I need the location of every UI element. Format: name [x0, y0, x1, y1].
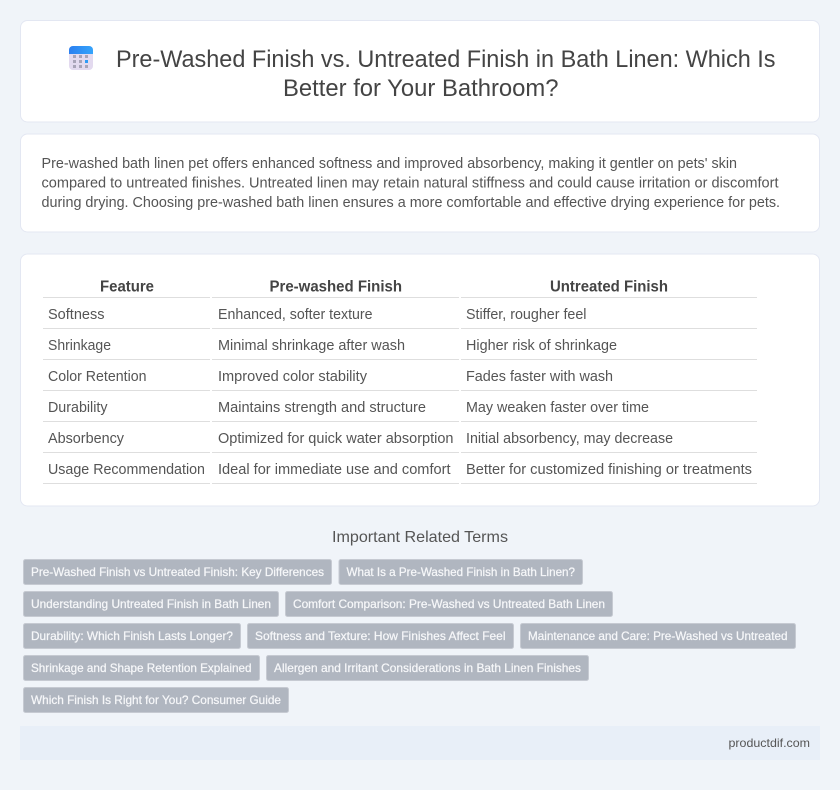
- row: color retention: Improved color stability: [218, 369, 368, 385]
- tag: [266, 656, 588, 680]
- tag: What Is a Pre-Washed Finish in Bath Linen?: [346, 565, 575, 579]
- row: usage recommendation: Ideal for immediate use and comfort: [218, 462, 451, 478]
- tag: [24, 656, 260, 680]
- intro text: compared to untreated finishes. Untreated linen may retain natural stiffness and could cause irritation or discomfort: [42, 176, 778, 192]
- row: color retention: [43, 369, 757, 391]
- intro text: Pre-washed bath linen pet offers enhanced softness and improved absorbency, making it gentler on pets' skin: [42, 156, 737, 172]
- row: durability: [43, 400, 757, 422]
- tag: Softness and Texture: How Finishes Affect Feel: [255, 629, 506, 643]
- row: absorbency: Initial absorbency, may decrease: [466, 431, 673, 447]
- intro text: during drying. Choosing pre-washed bath linen ensures a more comfortable and effective drying experience for pets.: [42, 195, 780, 211]
- row: color retention: Fades faster with wash: [466, 369, 613, 385]
- tag: [24, 592, 278, 616]
- row: durability: Maintains strength and structure: [218, 400, 426, 416]
- table header row: [43, 278, 757, 298]
- row: absorbency: Optimized for quick water absorption: [218, 431, 454, 447]
- footer: productdif.com: [728, 736, 810, 750]
- tag: Allergen and Irritant Considerations in Bath Linen Finishes: [274, 661, 581, 675]
- title: Pre-Washed Finish vs. Untreated Finish in Bath Linen: Which Is: [116, 46, 776, 73]
- panel: intro paragraph: [20, 134, 820, 232]
- tag: [248, 624, 514, 648]
- row: shrinkage: Higher risk of shrinkage: [466, 338, 617, 354]
- tag: [339, 560, 582, 584]
- row: absorbency: [43, 431, 757, 453]
- row: usage recommendation: [43, 462, 757, 484]
- tag: [520, 624, 796, 648]
- tag: Durability: Which Finish Lasts Longer?: [31, 629, 233, 643]
- intro text: [42, 156, 780, 211]
- row: shrinkage: [43, 338, 757, 360]
- tag: [24, 688, 288, 712]
- row: absorbency: Absorbency: [48, 431, 125, 447]
- row: softness: Softness: [48, 307, 104, 323]
- row: color retention: Color Retention: [48, 369, 146, 385]
- icon: calendar: [69, 46, 93, 70]
- tag: Pre-Washed Finish vs Untreated Finish: Key Differences: [31, 565, 324, 579]
- tag: [286, 592, 612, 616]
- title: Better for Your Bathroom?: [283, 75, 558, 102]
- row: durability: May weaken faster over time: [466, 400, 649, 416]
- tag: Which Finish Is Right for You? Consumer Guide: [31, 693, 281, 707]
- tag: Maintenance and Care: Pre-Washed vs Untreated: [528, 629, 788, 643]
- table header row: Untreated Finish: [550, 278, 668, 296]
- panel: title header: [20, 20, 820, 122]
- tag: Understanding Untreated Finish in Bath Linen: [31, 597, 271, 611]
- row: durability: Durability: [48, 400, 108, 416]
- table header row: Pre-washed Finish: [270, 278, 402, 296]
- heading: related terms: Important Related Terms: [332, 529, 508, 546]
- row: usage recommendation: Better for customized finishing or treatments: [466, 462, 752, 478]
- panel: comparison table: [20, 254, 820, 506]
- tag: Comfort Comparison: Pre-Washed vs Untreated Bath Linen: [293, 597, 605, 611]
- footer: [20, 726, 820, 760]
- row: usage recommendation: Usage Recommendation: [48, 462, 205, 478]
- row: shrinkage: Minimal shrinkage after wash: [218, 338, 405, 354]
- row: softness: Enhanced, softer texture: [218, 307, 372, 323]
- row: softness: Stiffer, rougher feel: [466, 307, 586, 323]
- table header row: Feature: [100, 278, 154, 296]
- row: softness: [43, 307, 757, 329]
- tag: [24, 560, 332, 584]
- tag: [24, 624, 240, 648]
- title: [116, 46, 776, 102]
- row: shrinkage: Shrinkage: [48, 338, 111, 354]
- tag: Shrinkage and Shape Retention Explained: [31, 661, 252, 675]
- related term tags: [24, 560, 796, 712]
